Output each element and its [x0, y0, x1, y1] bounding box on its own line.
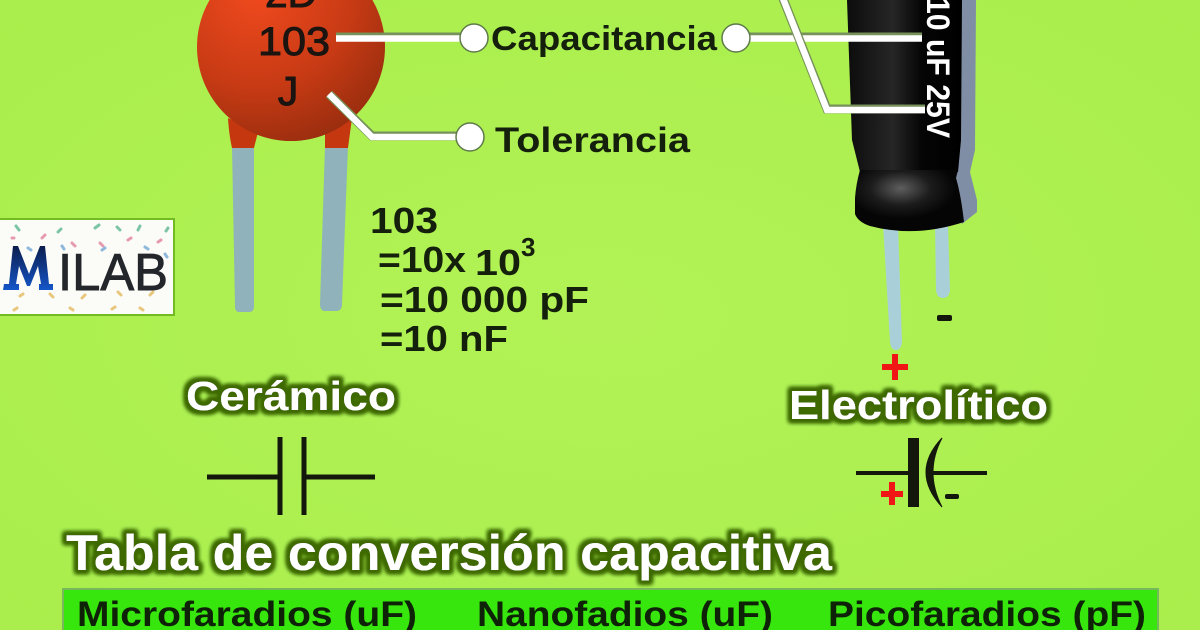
line: tolerancia — [329, 94, 470, 136]
label: tolerancia: Tolerancia — [495, 121, 691, 160]
positive lead — [883, 224, 902, 350]
can body — [847, 0, 962, 172]
table title: Tabla de conversión capacitiva — [66, 525, 833, 581]
heading: electrolitico: Electrolítico — [789, 382, 1048, 428]
lead polarity minus — [937, 315, 952, 321]
ceramic capacitor — [197, 0, 385, 312]
ceramic disc body — [197, 0, 385, 141]
minus sign — [945, 494, 959, 499]
rating text: 10 uF 25V — [920, 0, 956, 139]
logo word: ILAB — [58, 244, 168, 302]
label: capacitancia: Capacitancia — [491, 20, 718, 58]
line: capacitancia right — [736, 32, 922, 42]
=10 000 pF: =10 000 pF — [380, 279, 589, 320]
confetti pattern — [12, 225, 168, 310]
line: capacitancia left — [336, 32, 474, 42]
electrolytic capacitor — [847, 0, 977, 350]
=10x10^3 — [378, 232, 535, 283]
=10x10^3: 10 — [475, 242, 521, 283]
calculation text — [370, 200, 589, 359]
=10x10^3: =10x — [378, 239, 466, 280]
table header — [63, 589, 1158, 630]
logo M mark — [3, 246, 53, 290]
base rim — [855, 170, 964, 231]
node dots — [460, 24, 488, 52]
symbol: electrolytic capacitor — [856, 438, 987, 507]
lead shoulders — [228, 118, 352, 148]
side highlight — [950, 0, 977, 224]
right lead — [320, 146, 348, 311]
logo: MILAB — [0, 219, 174, 315]
plus sign — [881, 482, 903, 505]
103: 103 — [370, 200, 438, 241]
lead polarity plus — [882, 354, 908, 380]
connector lines — [329, 0, 925, 151]
=10x10^3: 3 — [521, 232, 535, 262]
symbol: ceramic capacitor — [207, 437, 375, 515]
negative lead — [935, 224, 950, 298]
line: voltage — [782, 0, 925, 109]
left lead — [232, 146, 254, 312]
code J: J — [278, 68, 298, 114]
heading: ceramico: Cerámico — [186, 373, 396, 419]
code 103: 103 — [258, 20, 330, 64]
=10 nF: =10 nF — [380, 318, 508, 359]
